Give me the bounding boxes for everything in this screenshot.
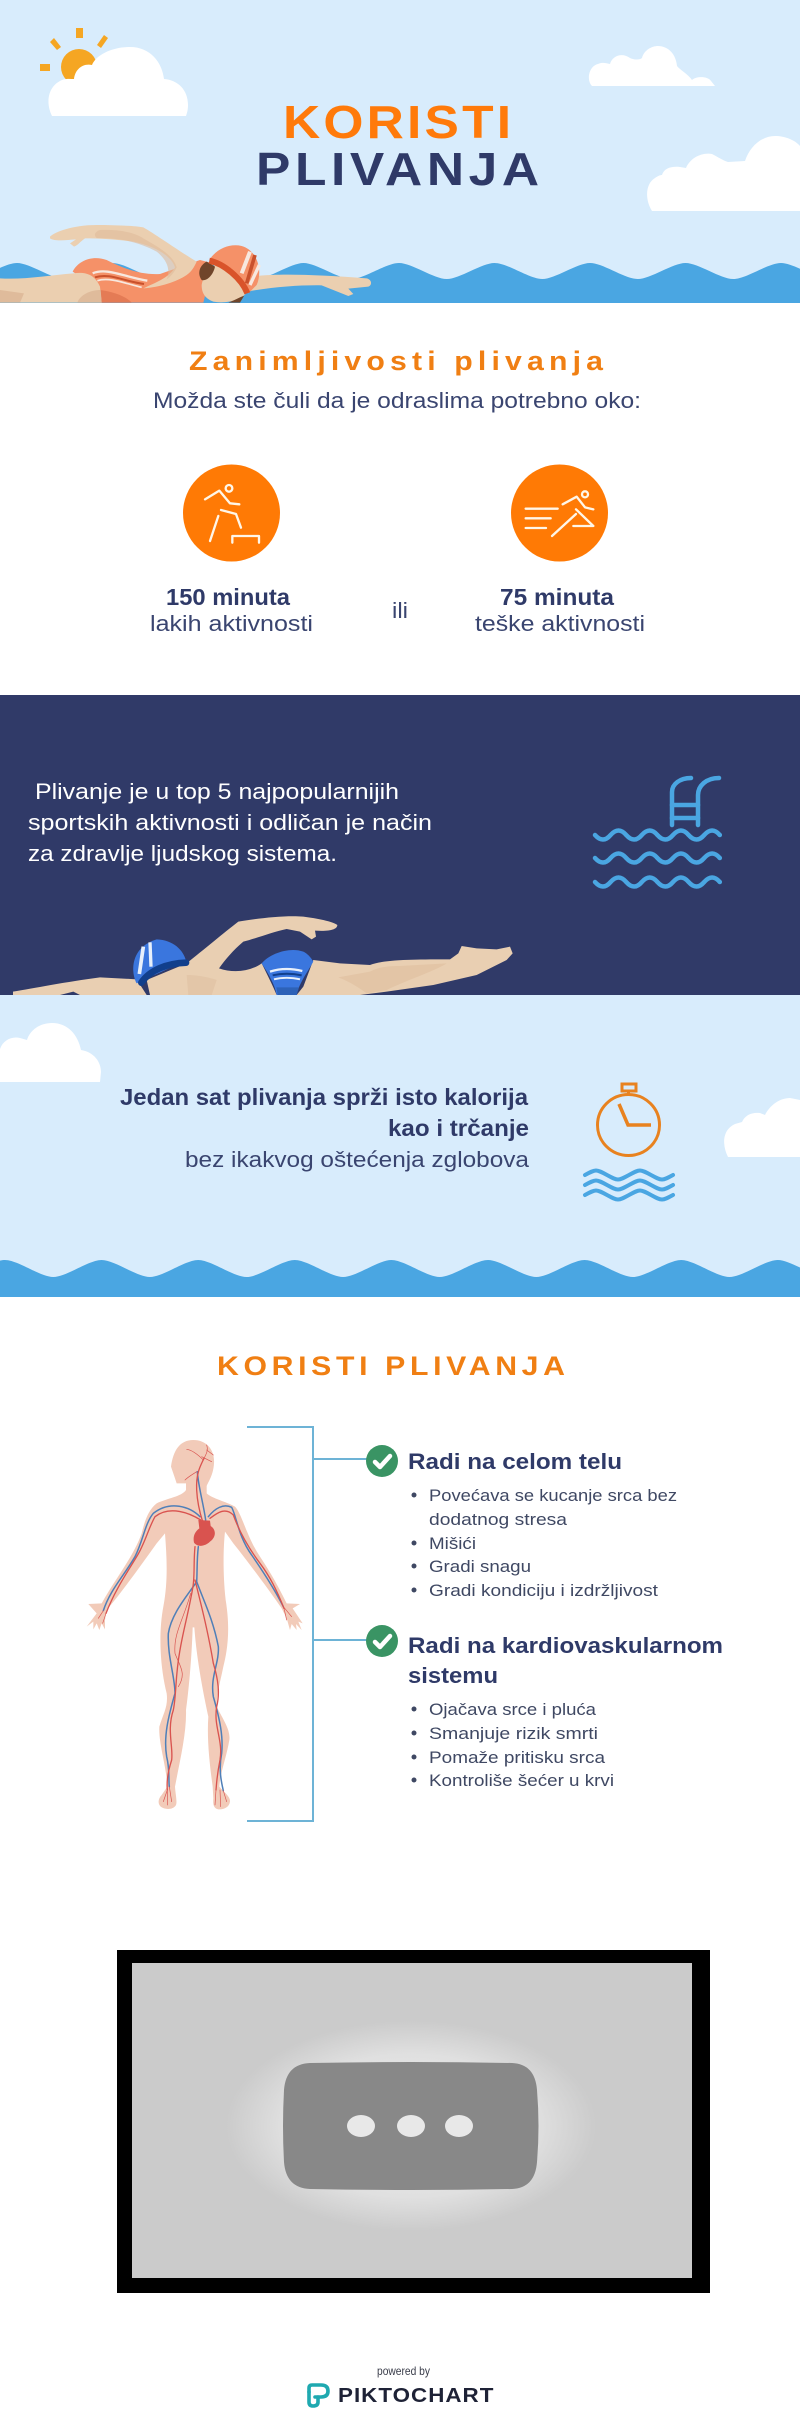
- icon: small waves: [585, 1170, 673, 1200]
- text: ili: ili: [392, 598, 408, 623]
- icon: runner: [511, 464, 608, 562]
- icon: heart: [194, 1520, 215, 1546]
- check item: Radi na kardiovaskularnom sistemu: sistemu: [408, 1663, 498, 1688]
- panel: calories: [0, 995, 800, 1297]
- list: whole body: Gradi kondiciju i izdržljivost: [429, 1581, 658, 1600]
- list: whole body: [412, 1486, 677, 1600]
- icon: step aerobics: [183, 464, 280, 562]
- list: cardiovascular: Kontroliše šećer u krvi: [429, 1771, 614, 1790]
- text: 75 minuta: [475, 584, 645, 636]
- footer: powered by Piktochart: PIKTOCHART: [338, 2385, 494, 2407]
- text: calories statement: kao i trčanje: [388, 1115, 529, 1141]
- text: calories statement: [120, 1084, 530, 1172]
- panel: hero banner: [0, 0, 800, 303]
- list: cardiovascular: Pomaže pritisku srca: [429, 1748, 606, 1767]
- text: 150 minuta: [150, 584, 313, 636]
- text: 75 minuta: teške aktivnosti: [475, 611, 645, 636]
- heading: Koristi plivanja: KORISTI PLIVANJA: [217, 1351, 570, 1382]
- icon: cloud right: [647, 136, 800, 211]
- check item: Radi na kardiovaskularnom sistemu: [366, 1625, 723, 1688]
- icon: cloud left: [0, 1023, 101, 1082]
- text: popularity statement: sportskih aktivnosti i odličan je način: [28, 810, 432, 835]
- list: whole body: dodatnog stresa: [429, 1510, 568, 1529]
- list: whole body: Povećava se kucanje srca bez: [429, 1486, 677, 1505]
- text: popularity statement: [28, 779, 432, 866]
- list: cardiovascular: Smanjuje rizik smrti: [429, 1724, 598, 1743]
- heading: Zanimljivosti plivanja: Zanimljivosti plivanja: [189, 346, 608, 377]
- icon: cloud top right: [589, 46, 715, 86]
- check item: Radi na celom telu: Radi na celom telu: [408, 1449, 622, 1474]
- waves: [0, 1260, 800, 1297]
- text: 150 minuta: 150 minuta: [166, 584, 290, 610]
- title: KORISTI: [283, 97, 514, 148]
- list: cardiovascular: [412, 1700, 614, 1790]
- illustration: female swimmer: [0, 225, 371, 303]
- icon: sun: [40, 28, 108, 85]
- title: [256, 97, 544, 195]
- list: whole body: Gradi snagu: [429, 1557, 531, 1576]
- list: whole body: Mišići: [429, 1534, 476, 1553]
- text: 150 minuta: lakih aktivnosti: [150, 611, 313, 636]
- check item: Radi na kardiovaskularnom sistemu: Radi na kardiovaskularnom: [408, 1633, 723, 1658]
- text: calories statement: bez ikakvog oštećenja zglobova: [185, 1147, 530, 1172]
- title: PLIVANJA: [256, 144, 544, 195]
- video placeholder: [117, 1950, 710, 2293]
- text: 75 minuta: 75 minuta: [500, 584, 614, 610]
- footer: powered by Piktochart: powered by: [377, 2364, 430, 2378]
- text: popularity statement: Plivanje je u top 5 najpopularnijih: [35, 779, 399, 804]
- illustration: circulatory system: [87, 1440, 303, 1809]
- text: popularity statement: za zdravlje ljudskog sistema.: [28, 841, 337, 866]
- icon: pool ladder: [595, 778, 720, 886]
- panel: navy popularity: [0, 695, 800, 995]
- list: cardiovascular: Ojačava srce i pluća: [429, 1700, 597, 1719]
- waves: [0, 263, 800, 303]
- bracket connector: [247, 1427, 368, 1821]
- illustration: male swimmer: [13, 916, 513, 995]
- icon: stopwatch: [598, 1084, 660, 1156]
- icon: cloud top left: [48, 47, 188, 116]
- check item: Radi na celom telu: [366, 1445, 622, 1477]
- text: intro: Možda ste čuli da je odraslima potrebno oko:: [153, 388, 641, 413]
- text: calories statement: Jedan sat plivanja sprži isto kalorija: [120, 1084, 528, 1110]
- footer: powered by Piktochart: [309, 2364, 494, 2407]
- icon: loading button: [283, 2062, 538, 2190]
- icon: Piktochart logo: [309, 2385, 328, 2406]
- icon: cloud right: [724, 1098, 800, 1157]
